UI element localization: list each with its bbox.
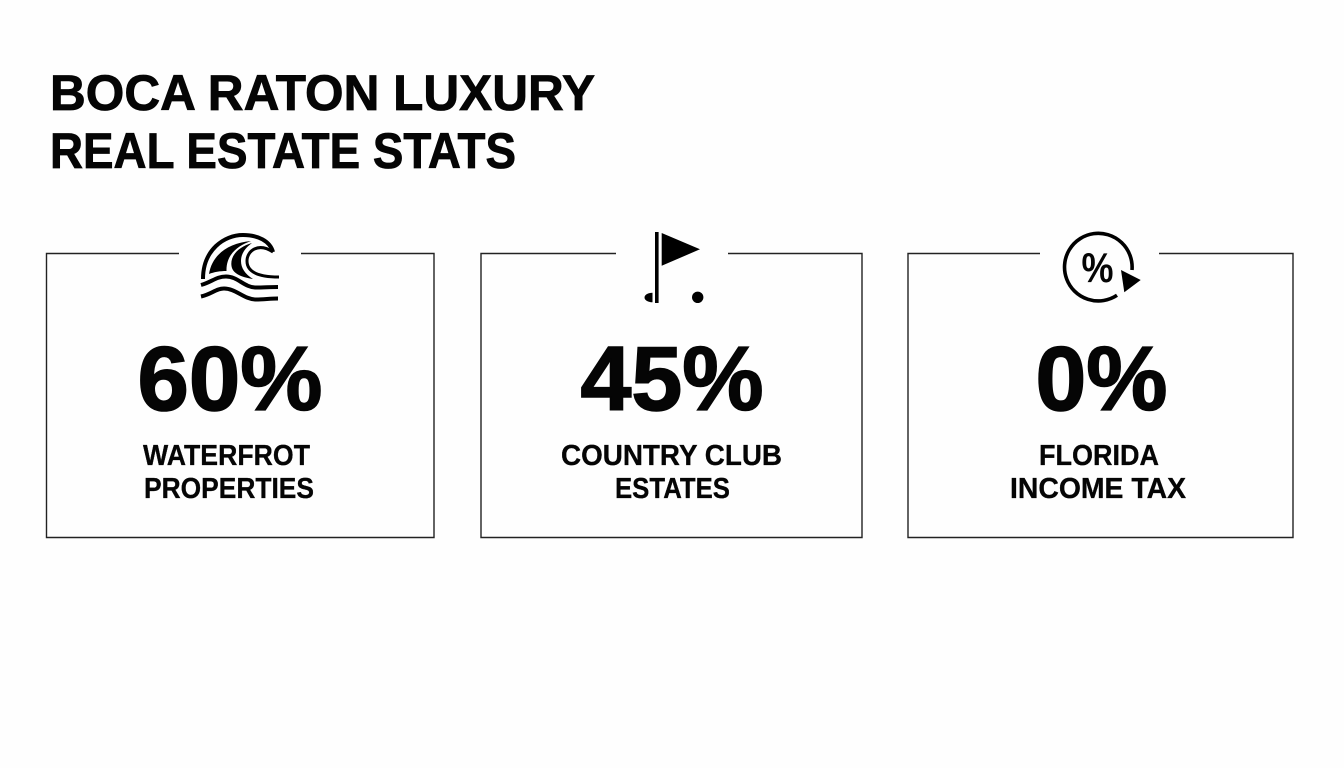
panel: waterfront properties bbox=[46, 235, 434, 538]
label: florida income tax: FLORIDA bbox=[1039, 440, 1159, 472]
label: country club estates: ESTATES bbox=[615, 473, 730, 505]
panel: florida income tax bbox=[908, 233, 1293, 537]
label: waterfront properties bbox=[143, 440, 314, 505]
icon: percent cycle bbox=[1065, 233, 1141, 301]
label: waterfront properties: PROPERTIES bbox=[144, 473, 314, 505]
label: florida income tax bbox=[1010, 440, 1186, 505]
label: florida income tax: INCOME TAX bbox=[1010, 473, 1186, 505]
title: REAL ESTATE STATS bbox=[50, 122, 516, 179]
label: waterfront properties: WATERFROT bbox=[143, 440, 311, 472]
stat: 45%: 45% bbox=[580, 329, 764, 430]
title bbox=[50, 64, 595, 179]
icon: percent cycle: % bbox=[1082, 244, 1114, 291]
icon: wave bbox=[201, 235, 279, 300]
stat: 60%: 60% bbox=[138, 329, 322, 430]
label: country club estates: COUNTRY CLUB bbox=[561, 440, 782, 472]
title: BOCA RATON LUXURY bbox=[50, 64, 595, 121]
label: country club estates bbox=[561, 440, 782, 505]
icon: golf flag bbox=[645, 232, 703, 303]
panel: country club estates bbox=[481, 232, 862, 538]
stat: 0%: 0% bbox=[1036, 329, 1168, 430]
